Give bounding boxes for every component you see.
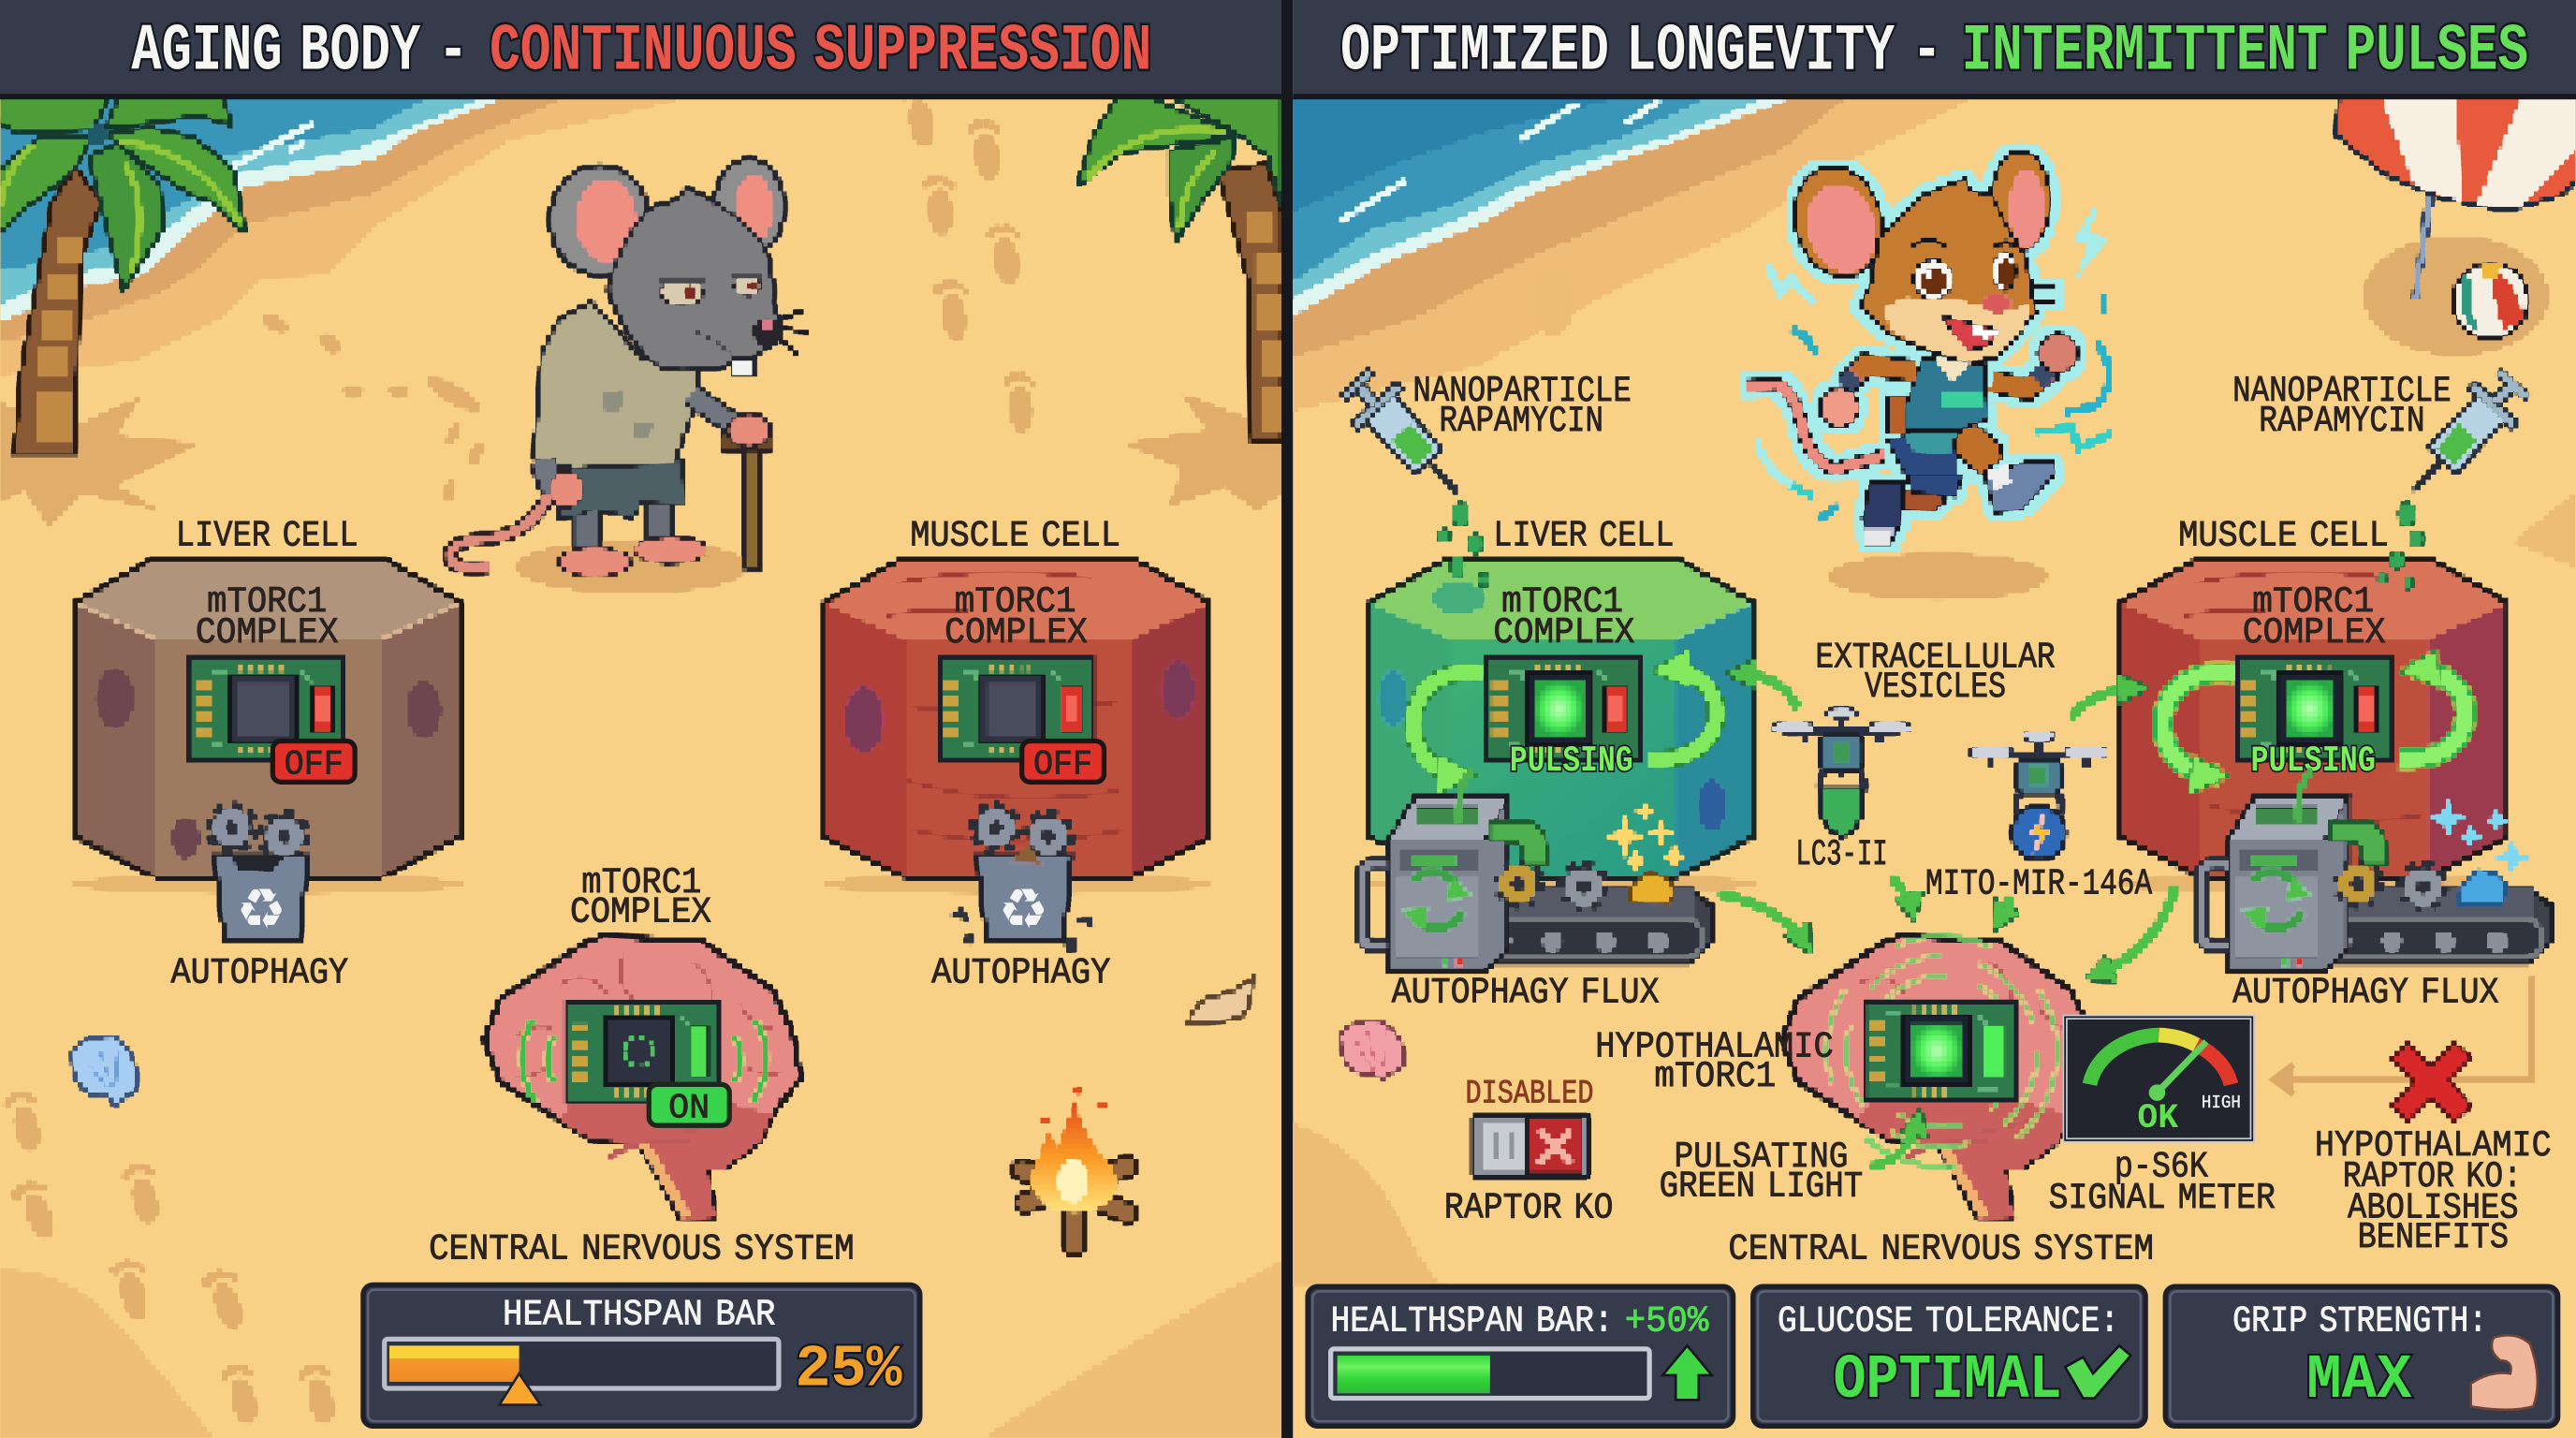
icon: energetic running mouse — [1747, 151, 2078, 544]
icon: broken autophagy bin muscle — [949, 807, 1094, 951]
right beach water — [1293, 98, 1969, 411]
icon: left palm tree — [0, 98, 245, 453]
label: nanoparticle rapamycin right — [2232, 371, 2452, 442]
label: mTORC1 complex — [944, 581, 1088, 653]
icon: broken autophagy bin muscle: ♻ — [999, 878, 1048, 943]
value: 25 percent: 25% — [795, 1335, 902, 1402]
label: extracellular vesicles — [1815, 638, 2056, 708]
icon: broken autophagy bin liver: ♻ — [236, 878, 286, 943]
label: autophagy flux left: AUTOPHAGY FLUX — [1392, 973, 1660, 1014]
label: healthspan bar: HEALTHSPAN BAR: — [1331, 1301, 1614, 1343]
label: nanoparticle rapamycin right: RAPAMYCIN — [2259, 401, 2425, 442]
label: hypothalamic raptor KO note: ABOLISHES — [2348, 1187, 2519, 1228]
label: mTORC1 complex: COMPLEX — [944, 612, 1088, 653]
badge: off — [1022, 741, 1104, 785]
title: aging body continuous suppression: CONTINUOUS SUPPRESSION — [490, 16, 1151, 90]
progress bar — [1331, 1349, 1649, 1399]
center divider — [1281, 0, 1293, 1438]
label: liver cell: LIVER CELL — [176, 516, 359, 557]
label: pulsating green light: GREEN LIGHT — [1660, 1167, 1863, 1208]
label: autophagy: AUTOPHAGY — [931, 953, 1110, 994]
badge: off: OFF — [285, 746, 344, 785]
label: hypothalamic raptor KO note — [2315, 1125, 2552, 1258]
panel: grip strength — [2165, 1286, 2558, 1426]
label: muscle cell: MUSCLE CELL — [910, 516, 1120, 557]
label: mTORC1 complex — [2243, 581, 2385, 653]
icon: pink shell — [1340, 1021, 1403, 1078]
icon: autophagy machine muscle — [2202, 772, 2552, 969]
title: aging body continuous suppression — [131, 16, 1151, 90]
title: optimized longevity intermittent pulses — [1340, 16, 2528, 90]
label: LC3-II: LC3-II — [1795, 834, 1888, 875]
label: mTORC1 complex: mTORC1 — [2252, 581, 2374, 623]
icon: right palm tree — [1077, 98, 1281, 440]
label: central nervous system: CENTRAL NERVOUS SYSTEM — [429, 1228, 855, 1269]
left beach water — [0, 98, 681, 374]
panel: glucose tolerance — [1753, 1286, 2145, 1426]
label: mTORC1 complex — [196, 581, 339, 653]
icon: tan shell — [1190, 979, 1251, 1022]
icon: brain with pulsating chip — [1782, 936, 2098, 1219]
label: mito-mir-146a: MITO-MIR-146A — [1925, 864, 2153, 905]
label: extracellular vesicles: VESICLES — [1865, 667, 2006, 708]
icon: syringe right — [2392, 362, 2537, 512]
icon: syringe left — [1334, 362, 1479, 512]
palm shadows — [0, 394, 1281, 526]
panel: optimized longevity — [1293, 98, 2576, 1426]
label: autophagy: AUTOPHAGY — [171, 953, 348, 994]
badge: off: OFF — [1033, 746, 1092, 785]
progress bar 25 percent — [385, 1339, 779, 1405]
panel: aging body — [0, 83, 1284, 1438]
badge: on — [649, 1084, 729, 1128]
label: liver cell: LIVER CELL — [1493, 516, 1674, 557]
energy sparks — [1758, 205, 2111, 520]
value: plus 50 percent: +50% — [1625, 1301, 1709, 1343]
label: disabled: DISABLED — [1466, 1076, 1593, 1113]
badge: off — [272, 741, 355, 785]
arrows: green signal flow — [1719, 674, 2175, 976]
label: grip strength: GRIP STRENGTH: — [2232, 1301, 2487, 1343]
label: hypothalamic raptor KO note: HYPOTHALAMIC — [2315, 1125, 2552, 1167]
label: hypothalamic mTORC1: mTORC1 — [1654, 1056, 1776, 1097]
label: hypothalamic raptor KO note: BENEFITS — [2358, 1217, 2509, 1258]
label: central nervous system: CENTRAL NERVOUS SYSTEM — [1728, 1228, 2154, 1269]
header: optimized longevity — [1293, 0, 2576, 99]
panel: liver cell optimized — [1367, 516, 1754, 894]
icon: check mark — [2065, 1345, 2130, 1399]
meter OK: OK — [2137, 1099, 2179, 1138]
label: glucose tolerance: GLUCOSE TOLERANCE: — [1778, 1301, 2119, 1343]
label: mTORC1 complex — [1493, 581, 1634, 653]
label: mTORC1 complex: COMPLEX — [1493, 612, 1634, 653]
label: mTORC1 complex: mTORC1 — [1501, 581, 1623, 623]
meter HIGH: HIGH — [2202, 1093, 2241, 1113]
label: nanoparticle rapamycin left: RAPAMYCIN — [1439, 401, 1603, 442]
label: pulsing: PULSING — [1510, 741, 1633, 782]
panel: muscle cell aging — [823, 516, 1211, 894]
icon: red X — [2392, 1043, 2471, 1121]
label: p-S6K signal meter: SIGNAL METER — [2049, 1178, 2276, 1219]
badge: on: ON — [668, 1089, 710, 1128]
label: pulsating green light — [1660, 1137, 1863, 1208]
header: aging body — [0, 0, 1281, 99]
label: hypothalamic raptor KO note: RAPTOR KO: — [2343, 1156, 2522, 1197]
label: mTORC1 complex: COMPLEX — [2243, 612, 2385, 653]
icon: broken autophagy bin liver — [211, 807, 307, 943]
footprints — [2, 83, 1040, 1428]
label: nanoparticle rapamycin left — [1412, 371, 1632, 442]
icon: raptor KO switch — [1473, 1114, 1587, 1178]
icon: flexed arm — [2471, 1335, 2538, 1410]
label: muscle cell: MUSCLE CELL — [2178, 516, 2389, 557]
icon: beach umbrella and ball — [2336, 98, 2576, 355]
arrow: abolished feedback — [2274, 976, 2532, 1094]
icon: drone with mito-mir coin — [1969, 731, 2108, 859]
label: mTORC1 complex: mTORC1 — [955, 581, 1076, 623]
icon: up arrow — [1662, 1345, 1712, 1400]
icon: autophagy machine liver — [1362, 772, 1712, 969]
label: mTORC1 complex brain: mTORC1 — [581, 862, 701, 903]
label: nanoparticle rapamycin right: NANOPARTICLE — [2232, 371, 2452, 412]
icon: blue shell — [72, 1036, 136, 1106]
sand details — [1293, 266, 2576, 1284]
value: optimal: OPTIMAL — [1834, 1345, 2062, 1416]
label: mTORC1 complex: mTORC1 — [207, 581, 327, 623]
shadow under jumping mouse — [1830, 553, 2047, 600]
label: p-S6K signal meter: p-S6K — [2115, 1147, 2209, 1188]
label: hypothalamic mTORC1 — [1595, 1026, 1834, 1097]
title: optimized longevity intermittent pulses: OPTIMIZED LONGEVITY - — [1340, 16, 1942, 90]
label: raptor KO: RAPTOR KO — [1444, 1187, 1614, 1228]
panel: muscle cell optimized — [2119, 516, 2507, 894]
icon: old gray mouse with cane — [450, 159, 809, 594]
icon: campfire — [1022, 1088, 1127, 1245]
label: autophagy flux right: AUTOPHAGY FLUX — [2232, 973, 2499, 1014]
label: pulsing: PULSING — [2250, 741, 2376, 782]
dune shading lower corners — [0, 1262, 1281, 1438]
value: max: MAX — [2306, 1345, 2412, 1416]
label: mTORC1 complex brain: COMPLEX — [570, 892, 711, 933]
label: extracellular vesicles: EXTRACELLULAR — [1815, 638, 2056, 679]
label: hypothalamic mTORC1: HYPOTHALAMIC — [1595, 1026, 1834, 1067]
icon: brain with active chip — [485, 936, 800, 1219]
label: mTORC1 complex brain — [570, 862, 711, 933]
label: p-S6K signal meter — [2049, 1147, 2276, 1219]
panel: healthspan bar aging — [363, 1284, 920, 1426]
label: nanoparticle rapamycin left: NANOPARTICLE — [1412, 371, 1632, 412]
icon: drone with LC3-II shield — [1773, 708, 1910, 836]
arrow: pulsating pointer — [1871, 1117, 1919, 1167]
droplets of rapamycin — [1439, 503, 2423, 589]
label: pulsating green light: PULSATING — [1674, 1137, 1848, 1178]
label: healthspan bar: HEALTHSPAN BAR — [503, 1295, 775, 1336]
icon: p-S6K signal meter — [2065, 1017, 2252, 1140]
panel: healthspan bar optimized — [1308, 1286, 1734, 1426]
label: mTORC1 complex: COMPLEX — [196, 612, 339, 653]
panel: liver cell aging — [74, 516, 461, 894]
title: aging body continuous suppression: AGING BODY - — [131, 16, 468, 90]
